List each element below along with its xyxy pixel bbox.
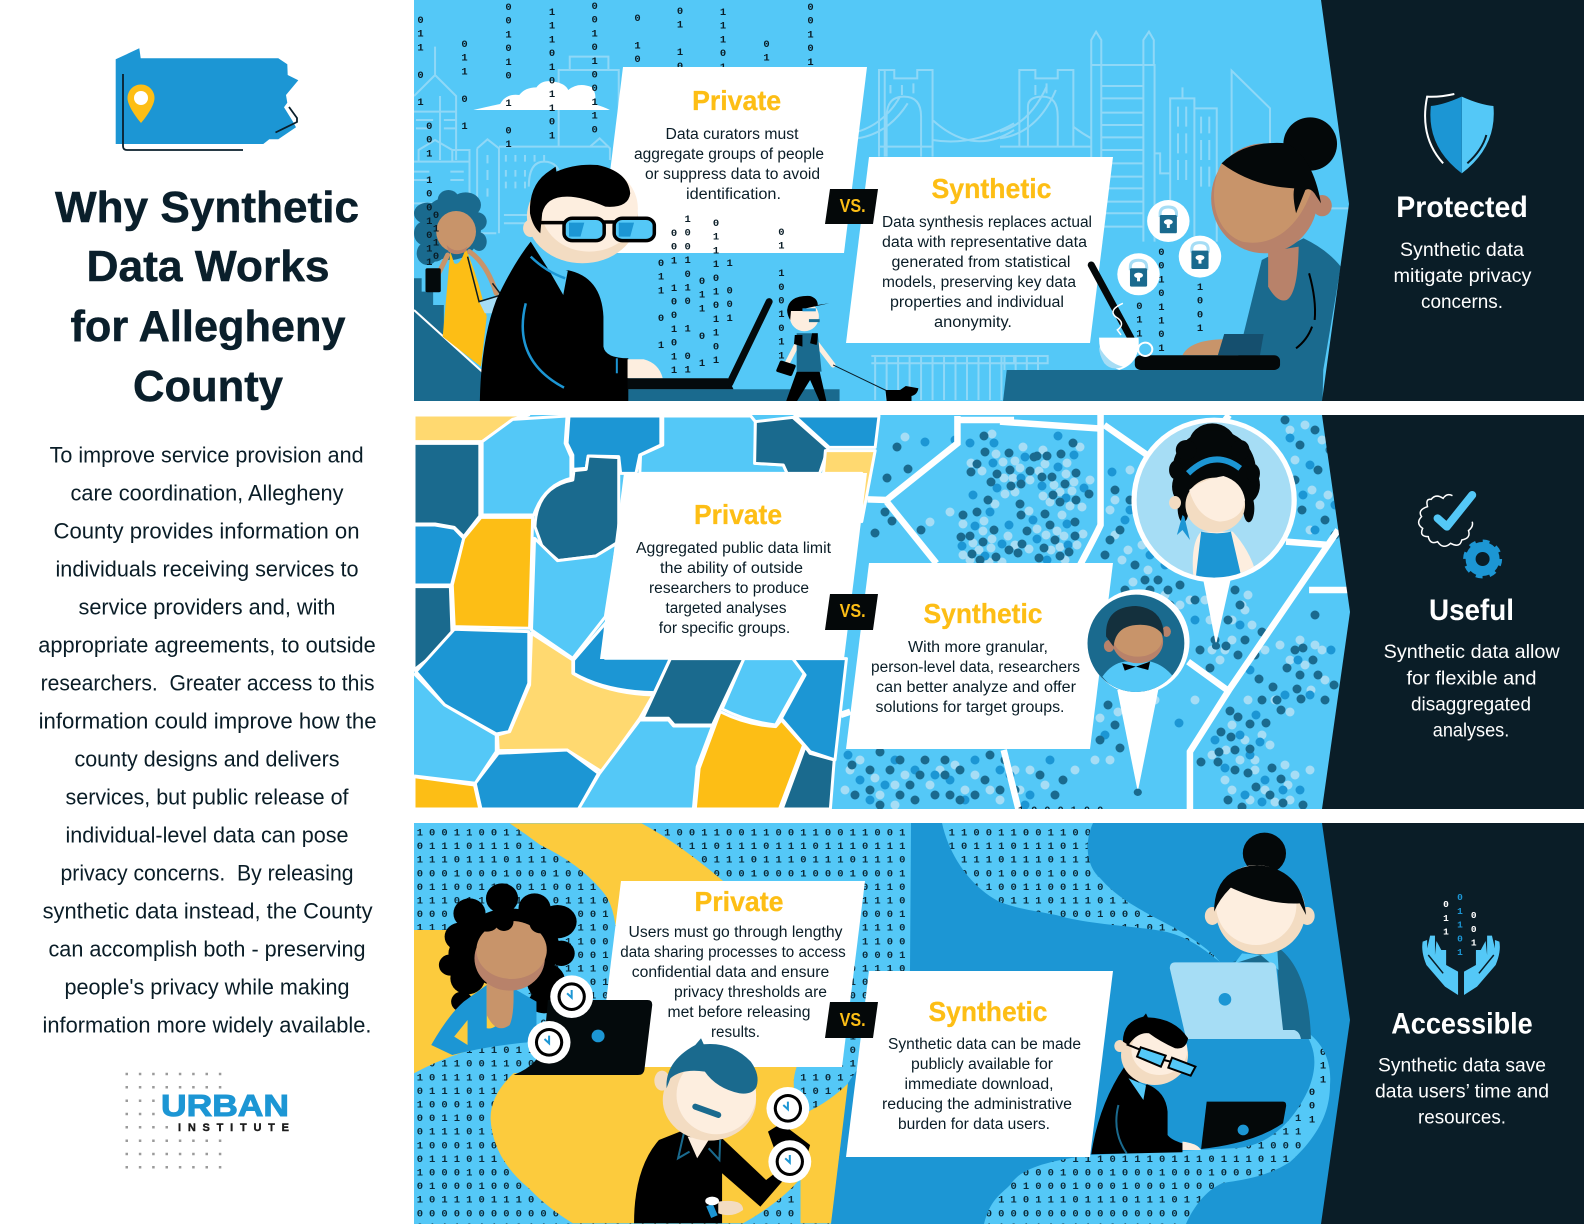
- binary digit field: 111011101110111011101110111011101110111011101110111011101110111011101110: [417, 923, 1307, 935]
- panel: useful: [414, 415, 1584, 817]
- icon: shield: [1425, 94, 1494, 173]
- intro text block: information could improve how the: [39, 709, 377, 734]
- vs badge: [825, 189, 878, 224]
- card: private: Users must go through lengthy: [628, 924, 843, 941]
- side panel: accessible: 01101: [1454, 892, 1466, 961]
- side panel: accessible: data users’ time and: [1375, 1080, 1549, 1102]
- card: synthetic: [846, 157, 1113, 343]
- card: private: aggregate groups of people: [634, 146, 824, 163]
- title: Data Works: [86, 242, 330, 291]
- side panel: protected: Protected: [1396, 191, 1528, 224]
- binary digits over hair: 1001011: [423, 175, 435, 271]
- card: synthetic: properties and individual: [890, 294, 1064, 311]
- binary data columns, lower: 011 0 1: [655, 258, 667, 354]
- dot density map: mid dots: [848, 436, 1340, 805]
- side panel: useful: Synthetic data allow: [1384, 641, 1561, 663]
- card: private: results.: [711, 1024, 760, 1041]
- side panel: accessible: 011: [1440, 899, 1452, 940]
- binary data columns, lower: 001 1001011: [668, 228, 680, 379]
- binary data columns, lower: 01110101101: [710, 218, 722, 369]
- card: private: [600, 67, 867, 253]
- binary digits over hair: [426, 176, 439, 265]
- intro text block: To improve service provision and: [50, 443, 364, 468]
- binary digit field: 111011101110111011101110111011101110111011101110111011101110111011101110: [417, 1045, 1307, 1057]
- binary digit field: 011101110111011101110111011101110111011101110111011101110111011101110111: [417, 1086, 1307, 1098]
- card: private: the ability of outside: [660, 560, 803, 577]
- intro text block: service providers and, with: [78, 595, 336, 620]
- figure: man with phone and clocks: [634, 1038, 811, 1223]
- binary data columns, lower: 1001: [1194, 282, 1206, 337]
- binary digit field: 000100010001000100010001000100010001000100010001000100010001000100010001: [417, 1018, 1307, 1030]
- binary digit field: 101110111011101110111011101110111011101110111011101110111011101110111011: [417, 1195, 1307, 1207]
- binary digit field: 100010001000100010001000100010001000100010001000100010001000100010001000: [417, 1140, 1307, 1152]
- binary data columns, lower: 011: [1133, 301, 1145, 342]
- binary data columns, upper: 001: [423, 121, 435, 162]
- side panel: accessible: [1321, 823, 1584, 1224]
- card: private: or suppress data to avoid: [645, 166, 820, 183]
- binary digit field: 100010001000100010001000100010001000100010001000100010001000100010001000: [417, 1168, 1307, 1180]
- intro text block: people's privacy while making: [64, 975, 350, 1000]
- binary digit field: 011001100110011001100110011001100110011001100110011001100110011001100110: [417, 991, 1307, 1003]
- binary data columns, lower: 1 001: [724, 258, 736, 326]
- binary digit field: 001100110011001100110011001100110011001100110011001100110011001100110011: [417, 1113, 1307, 1125]
- binary data columns, upper: 00101: [804, 2, 816, 70]
- cloud: [473, 81, 610, 110]
- side panel: useful: [1322, 415, 1584, 809]
- skyline illustration, left: [414, 47, 1014, 400]
- binary digit field: 000100010001000100010001000100010001000100010001000100010001000100010001: [417, 950, 1307, 962]
- card: synthetic: immediate download,: [904, 1076, 1054, 1093]
- binary digit field: 011001100110011001100110011001100110011001100110011001100110011001100110: [417, 882, 1307, 894]
- yellow background shapes: [414, 823, 848, 1223]
- intro text block: individual-level data can pose: [66, 823, 348, 848]
- card: synthetic: reducing the administrative: [882, 1096, 1072, 1113]
- card: synthetic: Synthetic: [932, 173, 1052, 204]
- binary data columns, lower: 011 0 1: [696, 276, 708, 372]
- binary data columns, upper: 001010 1 01: [502, 2, 514, 153]
- logo: Urban Institute: INSTITUTE: [178, 1122, 289, 1134]
- map pin: woman portrait: [1131, 418, 1297, 650]
- card: synthetic: models, preserving key data: [882, 274, 1076, 291]
- intro text block: researchers. Greater access to this: [41, 671, 375, 696]
- intro text block: individuals receiving services to: [56, 557, 358, 582]
- intro text block: appropriate agreements, to outside: [38, 633, 376, 658]
- card: synthetic: Synthetic: [928, 996, 1048, 1027]
- intro text block: care coordination, Allegheny: [70, 481, 344, 506]
- card: private: data sharing processes to access: [620, 944, 846, 961]
- title: [55, 183, 359, 411]
- card: private: met before releasing: [668, 1004, 810, 1021]
- dot density map: pale dots: [845, 425, 1345, 805]
- vs badge: [825, 594, 878, 630]
- side panel: protected: mitigate privacy: [1394, 265, 1532, 287]
- card: private: researchers to produce: [649, 580, 809, 597]
- intro text block: services, but public release of: [66, 785, 349, 810]
- binary digit field: 011101110111011101110111011101110111011101110111011101110111011101110111: [417, 841, 1307, 853]
- binary data columns, upper: 011 0 1: [458, 39, 470, 135]
- card: private: [600, 473, 867, 659]
- side panel: protected: concerns.: [1421, 291, 1503, 313]
- card: synthetic: [846, 971, 1113, 1157]
- card: synthetic: With more granular,: [908, 639, 1048, 656]
- panel: accessible: [414, 823, 1584, 1224]
- binary data columns, upper: 11101: [717, 7, 729, 76]
- card: private: for specific groups.: [659, 620, 790, 637]
- binary digit field: 000100010001000100010001000100010001000100010001000100010001000100010001: [417, 909, 1307, 921]
- map pin: man portrait: [1088, 589, 1190, 796]
- vs badge: [825, 1002, 878, 1038]
- side panel: protected: Synthetic data: [1400, 239, 1524, 261]
- blue background with data bands: [831, 823, 1350, 1224]
- side panel: useful: Useful: [1429, 594, 1514, 627]
- binary data columns, lower: 00101101: [1155, 247, 1167, 357]
- binary digit field: 101110111011101110111011101110111011101110111011101110111011101110111011: [417, 1072, 1307, 1084]
- figure: woman with phone and stairs: [414, 190, 501, 402]
- card: private: Private: [692, 85, 781, 116]
- card: synthetic: data with representative data: [882, 234, 1087, 251]
- card: synthetic: Synthetic data can be made: [888, 1036, 1081, 1053]
- figure: woman with bun and pale laptop: [1170, 833, 1315, 1039]
- binary data columns, upper: 01 10: [674, 6, 686, 74]
- side panel: protected: [1321, 0, 1584, 401]
- vs badge: VS.: [840, 196, 866, 216]
- card: synthetic: person-level data, researchers: [871, 659, 1080, 676]
- intro text block: County provides information on: [54, 519, 360, 544]
- side panel: accessible: 001: [1468, 910, 1479, 951]
- figure: woman at laptop with coffee: [1003, 117, 1341, 402]
- binary digit field: 011101110111011101110111011101110111011101110111011101110111011101110111: [417, 1127, 1307, 1139]
- binary data columns, upper: 1110101101: [546, 7, 558, 144]
- binary digit field: 011: [1317, 1047, 1329, 1088]
- binary data columns, lower: 1001010 1 01: [682, 214, 694, 378]
- binary data columns, upper: 011 0 1: [414, 15, 426, 111]
- figure: person walking dog: [776, 296, 918, 402]
- intro text block: [38, 443, 377, 1038]
- binary digit field: 011101110111011101110111011101110111011101110111011101110111011101110111: [417, 1154, 1307, 1166]
- binary data columns, lower: 01 1001011: [775, 227, 787, 364]
- binary digit field: 111011101110111011101110111011101110111011101110111011101110111011101110: [417, 855, 1307, 867]
- binary digit field: 111011101110111011101110111011101110111011101110111011101110111011101110: [417, 1004, 1307, 1016]
- icon: gears with checkmark: [1419, 495, 1473, 546]
- card: private: targeted analyses: [666, 600, 787, 617]
- intro text block: information more widely available.: [42, 1013, 372, 1038]
- card: synthetic: [846, 563, 1113, 749]
- figure: man at laptop with glasses: [480, 165, 840, 402]
- card: synthetic: Synthetic: [924, 598, 1042, 629]
- side panel: accessible: Accessible: [1391, 1008, 1533, 1040]
- side panel: useful: analyses.: [1433, 720, 1509, 742]
- side panel: useful: disaggregated: [1411, 694, 1531, 716]
- vs badge: VS.: [840, 1010, 866, 1030]
- card: private: Private: [694, 886, 784, 917]
- card: private: confidential data and ensure: [632, 964, 829, 981]
- card: private: Data curators must: [666, 126, 799, 143]
- side panel: accessible: resources.: [1418, 1106, 1506, 1128]
- intro text block: synthetic data instead, the County: [43, 899, 373, 924]
- street lines, right: [1000, 415, 1348, 810]
- binary data columns, upper: 01: [760, 39, 772, 66]
- binary data columns, upper: [414, 1, 816, 162]
- card: synthetic: anonymity.: [934, 314, 1012, 331]
- binary digit field: 000100010001000100010001000100010001000100010001000100010001000100010001: [417, 977, 1307, 989]
- intro text block: county designs and delivers: [74, 747, 340, 772]
- card: synthetic: Data synthesis replaces actual: [882, 214, 1092, 231]
- binary digit field: 110011001100110011001100110011001100110011001100110011001100110011001100: [417, 936, 1307, 948]
- side panel: useful: for flexible and: [1406, 668, 1536, 690]
- binary digit field: 010001000100010001000100010001000100010001000100010001000100010001000100: [417, 1181, 1307, 1193]
- card: synthetic: generated from statistical: [892, 254, 1070, 271]
- choropleth map: [414, 415, 879, 809]
- title: for Allegheny: [70, 302, 346, 351]
- card: synthetic: publicly available for: [911, 1056, 1053, 1073]
- skyline illustration, right: [1000, 32, 1349, 370]
- card: synthetic: burden for data users.: [898, 1116, 1050, 1133]
- binary digit field: 100110011001100110011001100110011001100110011001100110011001100110011001: [417, 1032, 1307, 1044]
- title: County: [133, 362, 284, 411]
- figure: man with glasses and black laptop: [1091, 1013, 1286, 1154]
- street lines, left: [841, 416, 1014, 715]
- binary digit field: [417, 828, 1329, 1224]
- binary digit field: 111011101110111011101110111011101110111011101110111011101110111011101110: [417, 964, 1307, 976]
- binary digit field: 000000000000000000000000000000000000000000000000000000000000000000000000: [417, 1208, 1307, 1220]
- intro text block: can accomplish both - preserving: [48, 937, 366, 962]
- title: Why Synthetic: [55, 183, 359, 232]
- logo: Urban Institute: URBAN: [161, 1088, 289, 1123]
- card: private: Private: [694, 499, 782, 530]
- card: private: identification.: [686, 186, 781, 203]
- binary digit field: 100110011001100110011001100110011001100110011001100110011001100110011001: [417, 828, 1307, 840]
- card: synthetic: can better analyze and offer: [876, 679, 1076, 696]
- dot density map: dark dots: [852, 420, 1340, 807]
- side panel: accessible: Synthetic data save: [1378, 1054, 1546, 1076]
- map icon: Pennsylvania with pin: [116, 48, 298, 150]
- binary data columns, lower: [655, 214, 1206, 379]
- card: private: privacy thresholds are: [674, 984, 827, 1001]
- binary data columns, upper: 0 10: [632, 13, 644, 68]
- binary digits over hair: 0110: [430, 210, 442, 265]
- partial binary digits at map edge: 1 0 0 0 1 0 0: [1018, 806, 1104, 817]
- binary data columns, upper: 0010100110: [589, 1, 601, 138]
- binary digit field: 001: [1306, 1087, 1318, 1128]
- card: private: Aggregated public data limit: [636, 540, 832, 557]
- binary digit field: 100010001000100010001000100010001000100010001000100010001000100010001000: [417, 1100, 1307, 1112]
- intro text block: privacy concerns. By releasing: [60, 861, 354, 886]
- card: private: [598, 881, 865, 1067]
- card: synthetic: solutions for target groups.: [876, 699, 1064, 716]
- binary digit field: 000100010001000100010001000100010001000100010001000100010001000100010001: [417, 868, 1307, 880]
- icon: hands holding data: [1422, 936, 1500, 995]
- figure: curly-haired woman with laptop and clocks: [431, 883, 652, 1075]
- logo: Urban Institute: [126, 1074, 289, 1167]
- vs badge: VS.: [840, 601, 866, 621]
- panel: protected: [414, 0, 1584, 402]
- binary digit field: 001100110011001100110011001100110011001100110011001100110011001100110011: [417, 1059, 1307, 1071]
- icons: padlocks: [1117, 200, 1221, 295]
- binary digit field: 111011101110111011101110111011101110111011101110111011101110111011101110: [417, 896, 1307, 908]
